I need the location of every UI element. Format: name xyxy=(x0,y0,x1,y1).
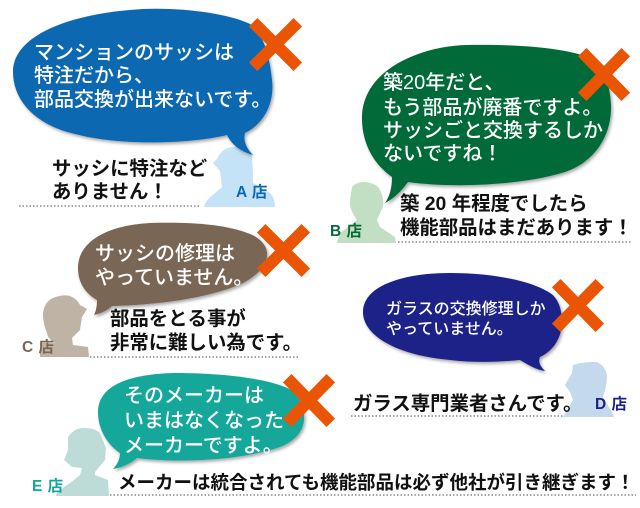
bubble text B: 築20年だと、 xyxy=(383,71,504,94)
shop label A: A 店 xyxy=(236,183,268,201)
person silhouette C xyxy=(40,295,89,357)
bubble text D: ガラスの交換修理しか xyxy=(386,300,546,318)
speech bubble D xyxy=(363,273,562,371)
speech bubble E xyxy=(98,373,304,469)
bubble text B: サッシごと交換するしか xyxy=(383,119,603,142)
panel: shop C xyxy=(22,223,306,357)
bubble text B: もう部品が廃番ですよ。 xyxy=(383,96,602,119)
dotted rule D xyxy=(351,415,564,417)
bubble text C: やっていません。 xyxy=(95,266,253,289)
person silhouette A xyxy=(204,147,275,207)
bubble text A: 部品交換が出来ないです。 xyxy=(34,88,271,111)
answer text A: ありません！ xyxy=(52,181,168,203)
shop label B: B 店 xyxy=(330,222,363,240)
cross mark A xyxy=(253,22,298,67)
bubble text C: サッシの修理は xyxy=(95,242,235,265)
answer text D: ガラス専門業者さんです。 xyxy=(353,393,582,415)
speech bubble C xyxy=(78,223,267,315)
cross mark E xyxy=(287,378,331,423)
bubble text E: メーカーですよ。 xyxy=(124,435,283,457)
answer text C: 非常に難しい為です。 xyxy=(110,332,302,354)
speech bubble B xyxy=(362,45,611,203)
dotted rule B xyxy=(398,241,631,243)
bubble text E: いまはなくなった xyxy=(124,410,284,432)
person silhouette E xyxy=(56,428,109,496)
person silhouette B xyxy=(337,182,396,243)
bubble text B: ないですね！ xyxy=(383,143,502,165)
panel: shop B xyxy=(330,45,633,243)
answer text B: 機能部品はまだあります！ xyxy=(400,217,633,239)
panel: shop D xyxy=(351,273,628,417)
dotted rule C xyxy=(90,356,299,358)
panel: shop A xyxy=(13,9,298,207)
answer text C: 部品をとる事が xyxy=(110,307,246,330)
dotted rule E xyxy=(110,494,636,496)
cross mark B xyxy=(582,52,626,97)
bubble text E: そのメーカーは xyxy=(124,385,264,407)
dotted rule A xyxy=(19,205,201,207)
shop label D: D 店 xyxy=(595,395,628,413)
answer text E: メーカーは統合されても機能部品は必ず他社が引き継ぎます！ xyxy=(118,472,635,493)
bubble text A: 特注だから、 xyxy=(34,64,154,87)
panel: shop E xyxy=(32,373,636,496)
shop label E: E 店 xyxy=(32,477,64,495)
answer text A: サッシに特注など xyxy=(52,158,208,180)
cross mark D xyxy=(556,283,600,328)
speech bubble A xyxy=(13,9,272,155)
cross mark C xyxy=(261,228,306,273)
answer text B: 築 20 年程度でしたら xyxy=(400,192,587,215)
bubble text D: やっていません。 xyxy=(386,320,513,338)
person silhouette D xyxy=(563,362,614,417)
shop label C: C 店 xyxy=(22,338,55,356)
bubble text A: マンションのサッシは xyxy=(34,42,234,64)
